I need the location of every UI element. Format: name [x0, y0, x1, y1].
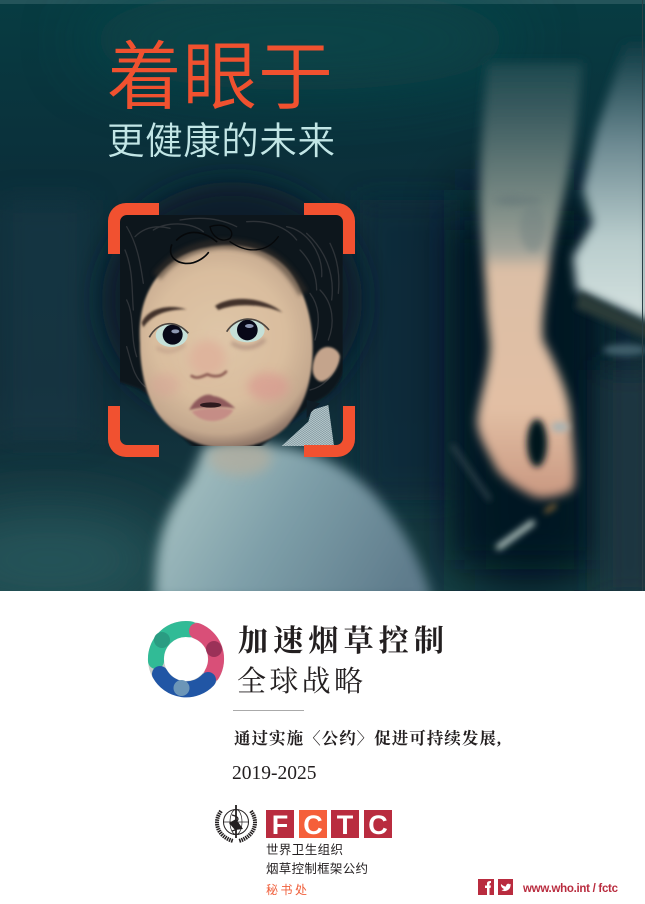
icon: WHO emblem: [217, 805, 255, 841]
ear: [313, 347, 340, 381]
icon: facebook: [478, 879, 494, 895]
title: 更健康的未来: [107, 120, 335, 162]
child: blurred shirt: [155, 445, 432, 600]
FCTC logo: C: [303, 810, 323, 840]
FCTC name: 世界卫生组织: [266, 843, 343, 857]
forehead hair shadow: [157, 244, 303, 293]
FCTC logo: [266, 810, 392, 840]
face: [140, 245, 313, 448]
strategy subtitle: 通过实施〈公约〉促进可持续发展,: [234, 728, 501, 748]
under-eye shadow: [157, 344, 185, 351]
nose: [191, 341, 224, 373]
curls: [171, 225, 278, 263]
FCTC logo: F: [272, 810, 288, 840]
strategy heading: [237, 625, 444, 698]
hair mass: [113, 210, 347, 450]
child: blurred hair halo: [98, 179, 364, 365]
corner brackets: [108, 203, 355, 457]
photo: blurred background scene: [0, 0, 645, 610]
strategy logo ring: [154, 629, 222, 696]
left eye: [156, 324, 188, 347]
FCTC name: 烟草控制框架公约: [266, 861, 368, 876]
cheeks: [248, 373, 289, 401]
eyebrows: [142, 307, 187, 327]
mouth: [189, 395, 235, 410]
website: www.who.int / fctc: [522, 883, 619, 895]
secretariat: 秘书处: [266, 883, 307, 897]
title: 着眼于: [107, 35, 333, 119]
right eye: [230, 318, 265, 342]
child face: sharp focus window: [113, 210, 347, 450]
title: [107, 35, 335, 162]
icon: twitter: [498, 879, 513, 895]
strategy subtitle: [232, 728, 501, 784]
FCTC name: [266, 843, 368, 876]
strategy heading: 加速烟草控制: [238, 625, 444, 658]
striped collar: [282, 405, 334, 446]
FCTC logo: C: [368, 810, 388, 840]
FCTC logo: T: [337, 810, 354, 840]
strategy subtitle: 2019-2025: [232, 763, 316, 784]
strategy heading: 全球战略: [237, 665, 363, 698]
